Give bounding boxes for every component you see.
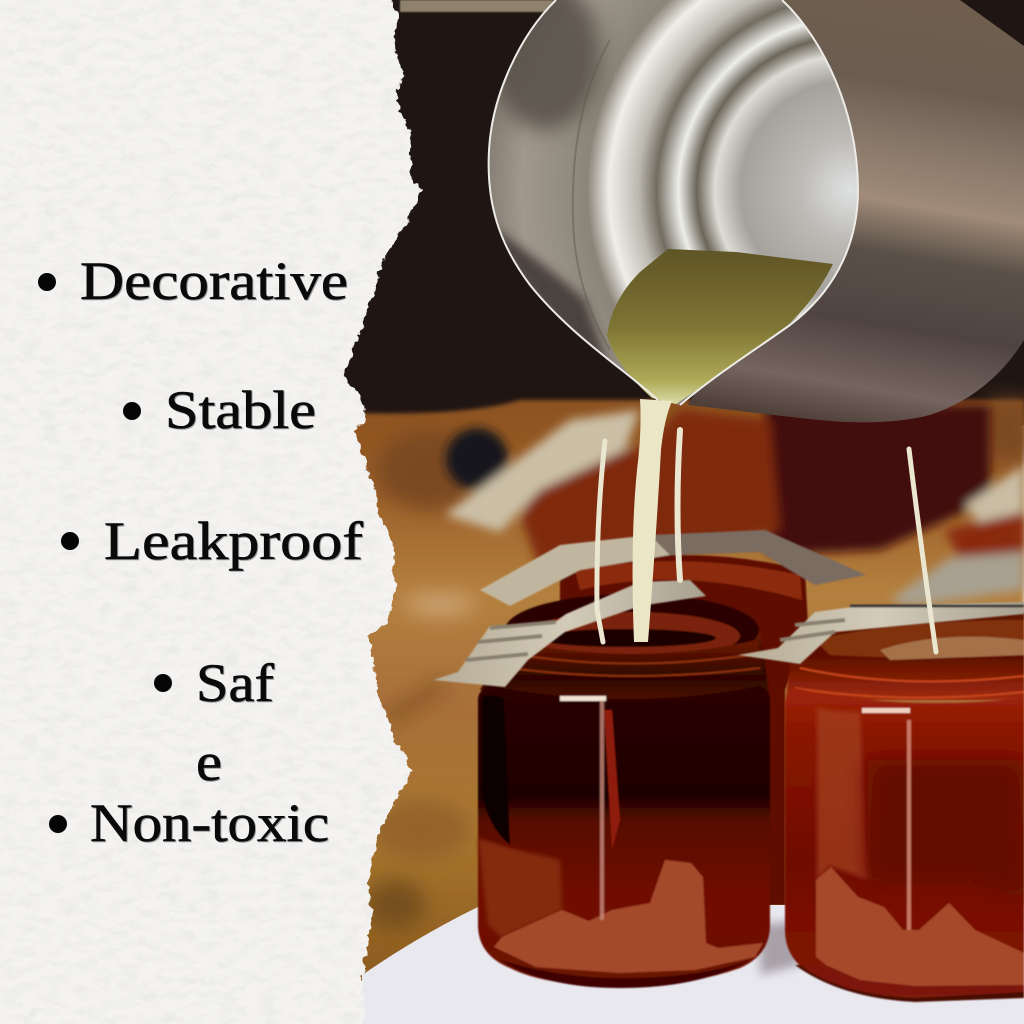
melted wax in pitcher (607, 249, 833, 404)
right jar light panel (817, 708, 868, 880)
item: Safe, wrapped across two lines (154, 653, 274, 792)
far clip (445, 410, 640, 532)
bullet list (38, 251, 363, 853)
pitcher (489, 0, 1024, 422)
pitcher interior (489, 0, 858, 405)
middle jar rim glow (575, 561, 802, 600)
right jar wax top (880, 637, 1024, 660)
right jar neck (786, 612, 1024, 700)
left jar body (478, 686, 770, 986)
photo background: beige top strip (400, 0, 570, 12)
cotton wicks (597, 430, 936, 652)
right jar base (795, 965, 1024, 1002)
item: Leakproof: Leakproof (104, 511, 363, 571)
dark lower left shade (499, 226, 612, 361)
left jar inner rim glow (524, 612, 740, 660)
right jar shine (862, 708, 910, 713)
right jar (785, 612, 1024, 1002)
item: Decorative: Decorative (80, 251, 348, 311)
photo background: dark wall (330, 0, 1024, 425)
left jar opening (505, 594, 759, 666)
left jar base (500, 960, 750, 988)
blurred background objects (445, 405, 1024, 606)
item: Non-toxic: Non-toxic (90, 793, 329, 853)
pitcher outer body (688, 0, 1024, 422)
item: Stable (123, 380, 316, 440)
dark top left shade (490, 0, 600, 130)
wick clip: left (433, 580, 706, 687)
item: Safe, wrapped across two lines: e (196, 732, 222, 792)
left jar amber corner (478, 838, 562, 937)
right jar opening (815, 620, 1024, 658)
middle jar clip left (480, 535, 670, 606)
left jar (478, 594, 770, 988)
far jars (765, 405, 990, 555)
left jar neck front (480, 640, 768, 702)
right jar body (785, 688, 1024, 1000)
inner ridge line (573, 40, 610, 350)
middle jar clip right (650, 530, 866, 585)
far red jar rim right (945, 512, 1024, 560)
pitcher interior shading (490, 0, 610, 370)
left jar left shine (482, 695, 510, 845)
wick clip: right (738, 602, 1024, 664)
left jar neck ridges (510, 655, 760, 676)
left jar neck (478, 630, 770, 700)
dark ball (446, 428, 508, 490)
left jar shine (560, 696, 606, 701)
right jar wax (816, 867, 1024, 986)
item: Safe, wrapped across two lines: Saf (196, 653, 274, 713)
item: Stable: Stable (165, 380, 316, 440)
left jar red reflection (604, 710, 620, 850)
wood grain patches (365, 400, 1024, 930)
far clip right (965, 465, 1024, 530)
left jar dark hole (536, 629, 716, 647)
left jar wax (494, 860, 763, 973)
right jar dark band (868, 760, 1024, 900)
right jar neck ridges (795, 668, 1024, 698)
jar shadow on table (760, 920, 800, 975)
left jar centre highlight (600, 700, 604, 920)
white table (362, 905, 1024, 1024)
torn paper panel (0, 0, 440, 1024)
pitcher rim (489, 0, 858, 405)
far amber jar (522, 410, 780, 570)
middle jar behind (480, 530, 866, 905)
wax stream (633, 399, 672, 642)
right jar highlight (907, 720, 911, 930)
right far clip (890, 552, 1024, 606)
photo background: wooden table (330, 400, 1024, 1005)
